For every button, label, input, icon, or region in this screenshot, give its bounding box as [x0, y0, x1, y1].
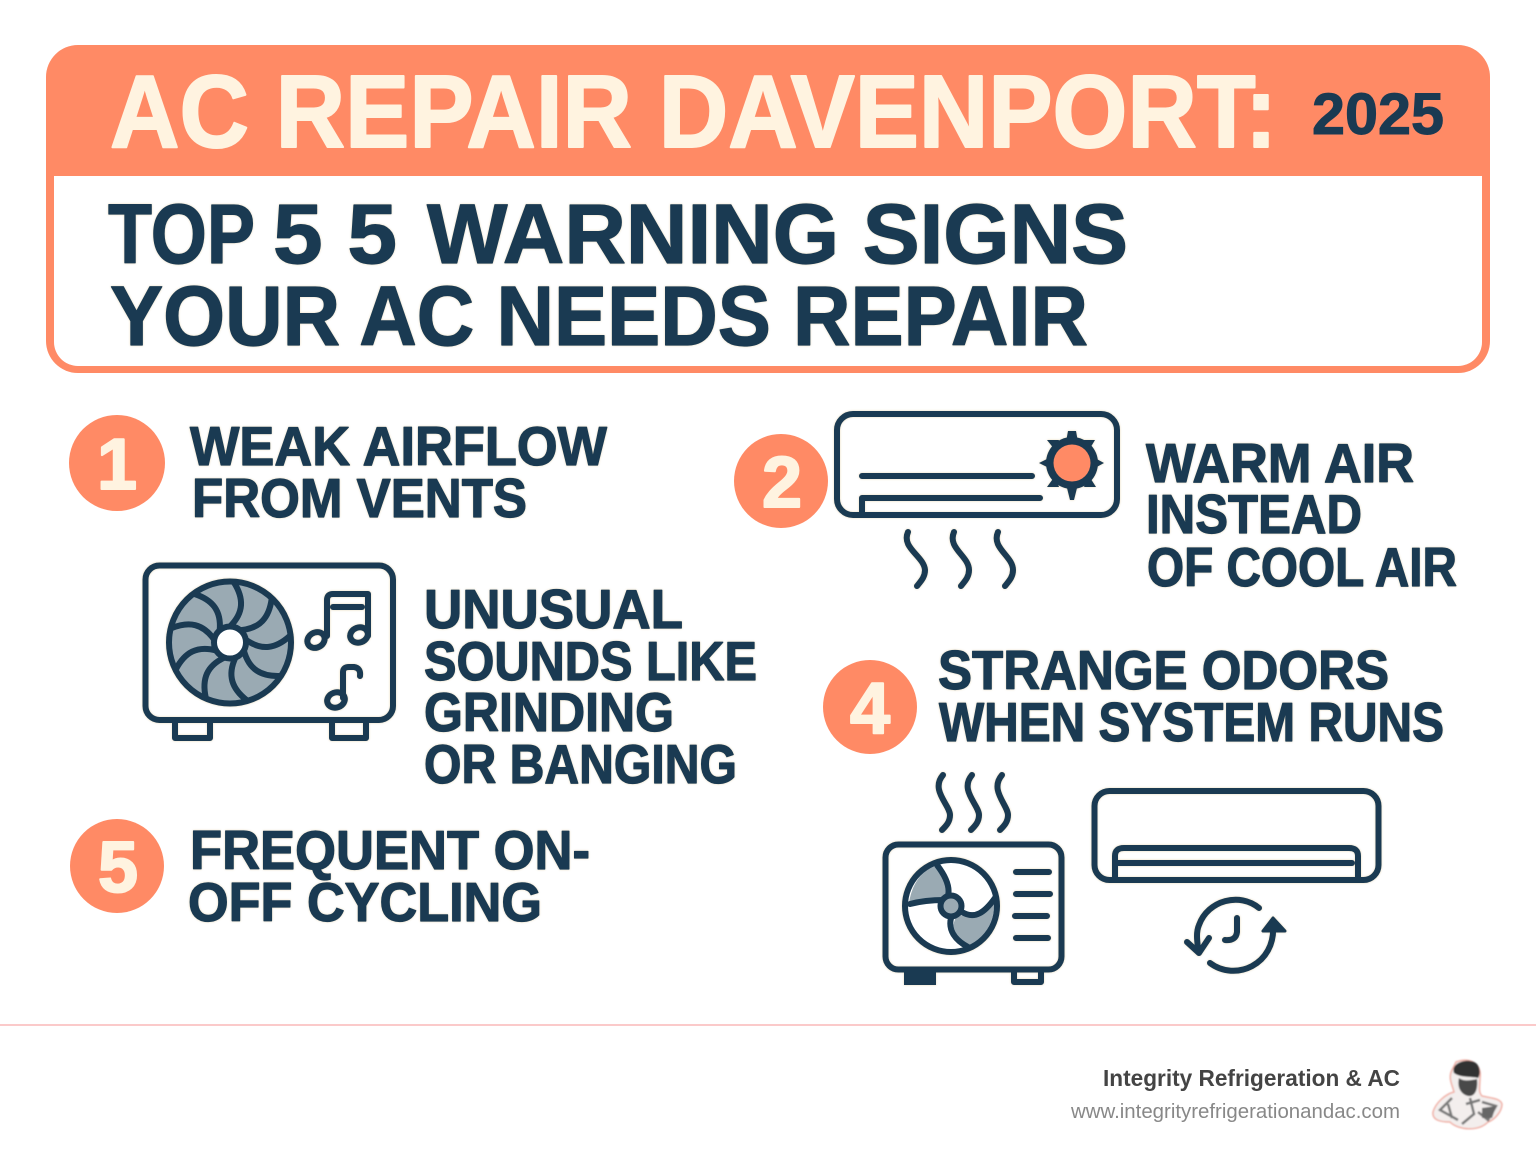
- number badge 2: 2: [762, 443, 802, 523]
- subtitle: TOP: [108, 187, 255, 281]
- subtitle: 5 5: [273, 187, 397, 281]
- heading: weak airflow: WEAK AIRFLOW: [190, 415, 607, 477]
- header panel: [46, 45, 1490, 373]
- heading: strange odors: [938, 639, 1444, 753]
- sign 1: weak airflow: [69, 415, 607, 529]
- number badge 1: 1: [97, 425, 137, 505]
- heading: warm air: INSTEAD: [1146, 483, 1362, 545]
- subtitle: WARNING SIGNS: [427, 187, 1128, 281]
- number badge 5: [70, 819, 164, 913]
- heading: strange odors: WHEN SYSTEM RUNS: [939, 691, 1444, 753]
- heading: unusual sounds: GRINDING: [424, 681, 674, 743]
- heading: frequent cycling: [188, 819, 590, 933]
- heading: frequent cycling: OFF CYCLING: [188, 871, 542, 933]
- year: 2025: [1312, 82, 1444, 147]
- heading: warm air: WARM AIR: [1146, 432, 1414, 494]
- number badge 5: 5: [98, 828, 138, 908]
- sign 2: warm air: [734, 414, 1457, 598]
- footer: [0, 1024, 1536, 1129]
- title: AC REPAIR DAVENPORT:: [110, 54, 1277, 169]
- heading: warm air: [1146, 432, 1457, 598]
- website: www.integrityrefrigerationandac.com: [1070, 1101, 1400, 1123]
- number badge 4: 4: [850, 669, 890, 749]
- sign 4: strange odors: [823, 639, 1444, 985]
- heading: unusual sounds: SOUNDS LIKE: [424, 630, 757, 692]
- subtitle: [108, 187, 1128, 363]
- icon: outdoor unit with rising odor waves: [886, 775, 1062, 985]
- subtitle: YOUR AC NEEDS REPAIR: [110, 269, 1088, 363]
- sign 5: frequent cycling: [70, 819, 590, 933]
- heading: warm air: OF COOL AIR: [1147, 536, 1457, 598]
- heading: weak airflow: FROM VENTS: [192, 467, 527, 529]
- number badge 4: [823, 660, 917, 754]
- heading: unusual sounds: UNUSUAL: [424, 578, 683, 640]
- icon: technician mascot: [1433, 1060, 1502, 1129]
- heading: weak airflow: [190, 415, 607, 529]
- icon: wall AC with sun and heat waves: [837, 414, 1117, 586]
- heading: strange odors: STRANGE ODORS: [938, 639, 1389, 701]
- icon: wall AC with on-off cycle arrows: [1094, 791, 1378, 971]
- heading: unusual sounds: [424, 578, 757, 795]
- number badge 2: [734, 434, 828, 528]
- number badge 1: [69, 415, 165, 511]
- heading: unusual sounds: OR BANGING: [424, 733, 737, 795]
- company name: Integrity Refrigeration & AC: [1103, 1065, 1400, 1091]
- icon: outdoor unit with fan and music notes: [146, 566, 393, 738]
- heading: frequent cycling: FREQUENT ON-: [190, 819, 590, 881]
- sign 3: unusual sounds: [146, 566, 757, 795]
